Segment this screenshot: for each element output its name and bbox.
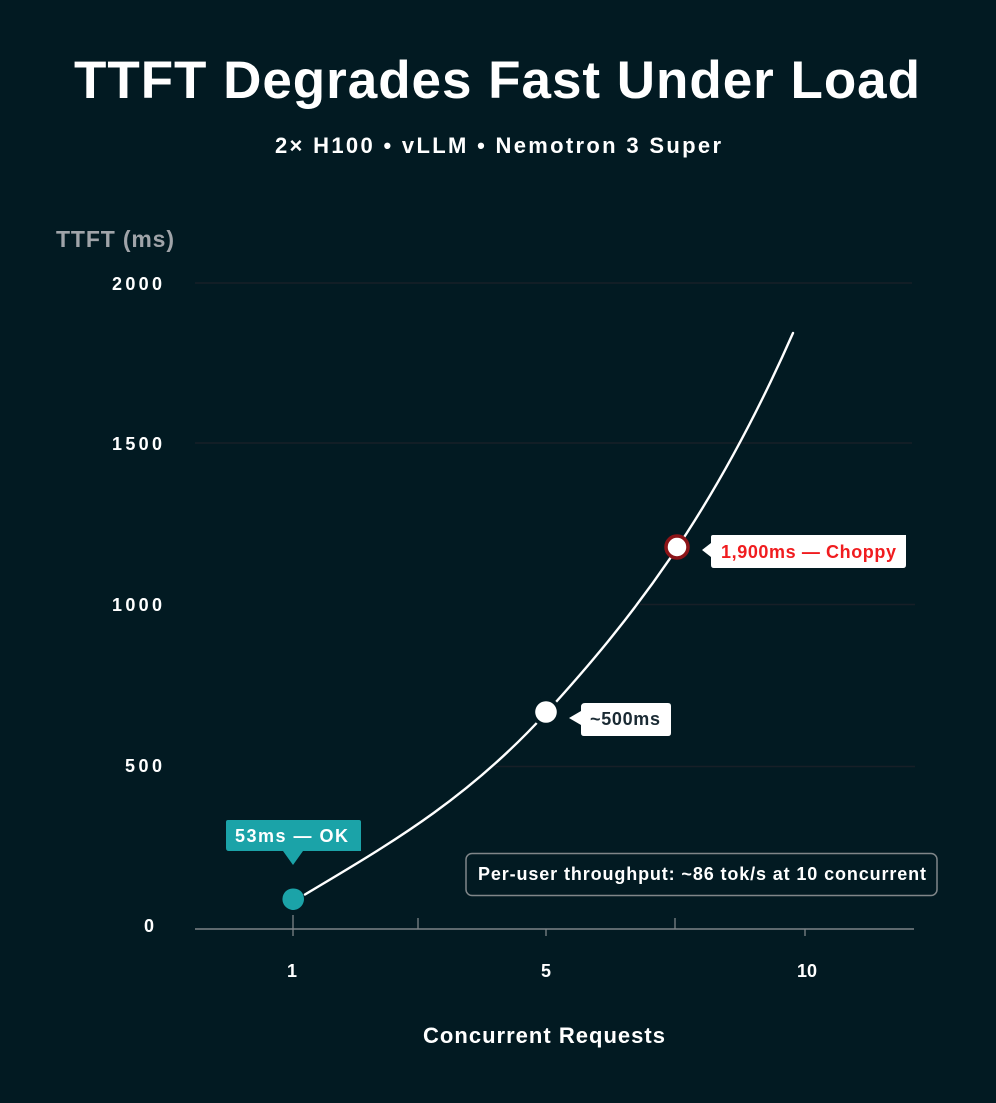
x axis	[195, 915, 914, 936]
x axis labels	[287, 961, 817, 981]
y axis labels: 1000	[112, 595, 162, 615]
x axis labels: 10	[797, 961, 817, 981]
callout: 53ms OK: 53ms — OK	[235, 826, 348, 846]
data point: 1 request	[282, 888, 304, 910]
callout: 53ms OK	[226, 820, 361, 865]
x axis labels: 1	[287, 961, 297, 981]
latency curve	[305, 333, 793, 894]
callout: 1,900ms choppy: 1,900ms — Choppy	[721, 542, 896, 562]
note: throughput: Per-user throughput: ~86 tok/s at 10 concurrent	[478, 864, 926, 884]
y axis title: TTFT (ms)	[56, 226, 174, 252]
title: TTFT Degrades Fast Under Load	[74, 51, 920, 110]
note: throughput	[466, 854, 937, 896]
y axis labels: 500	[125, 756, 162, 776]
data point: choppy	[666, 536, 688, 558]
x axis labels: 5	[541, 961, 551, 981]
data point: 5 requests	[532, 698, 560, 726]
callout: 1,900ms choppy	[702, 535, 906, 568]
callout: 500ms	[569, 703, 671, 736]
x axis title: Concurrent Requests	[423, 1023, 665, 1048]
subtitle: 2× H100 • vLLM • Nemotron 3 Super	[275, 133, 721, 158]
y axis labels	[112, 274, 162, 936]
callout: 500ms: ~500ms	[590, 709, 660, 729]
y axis labels: 2000	[112, 274, 162, 294]
y axis labels: 0	[144, 916, 154, 936]
y axis labels: 1500	[112, 434, 162, 454]
